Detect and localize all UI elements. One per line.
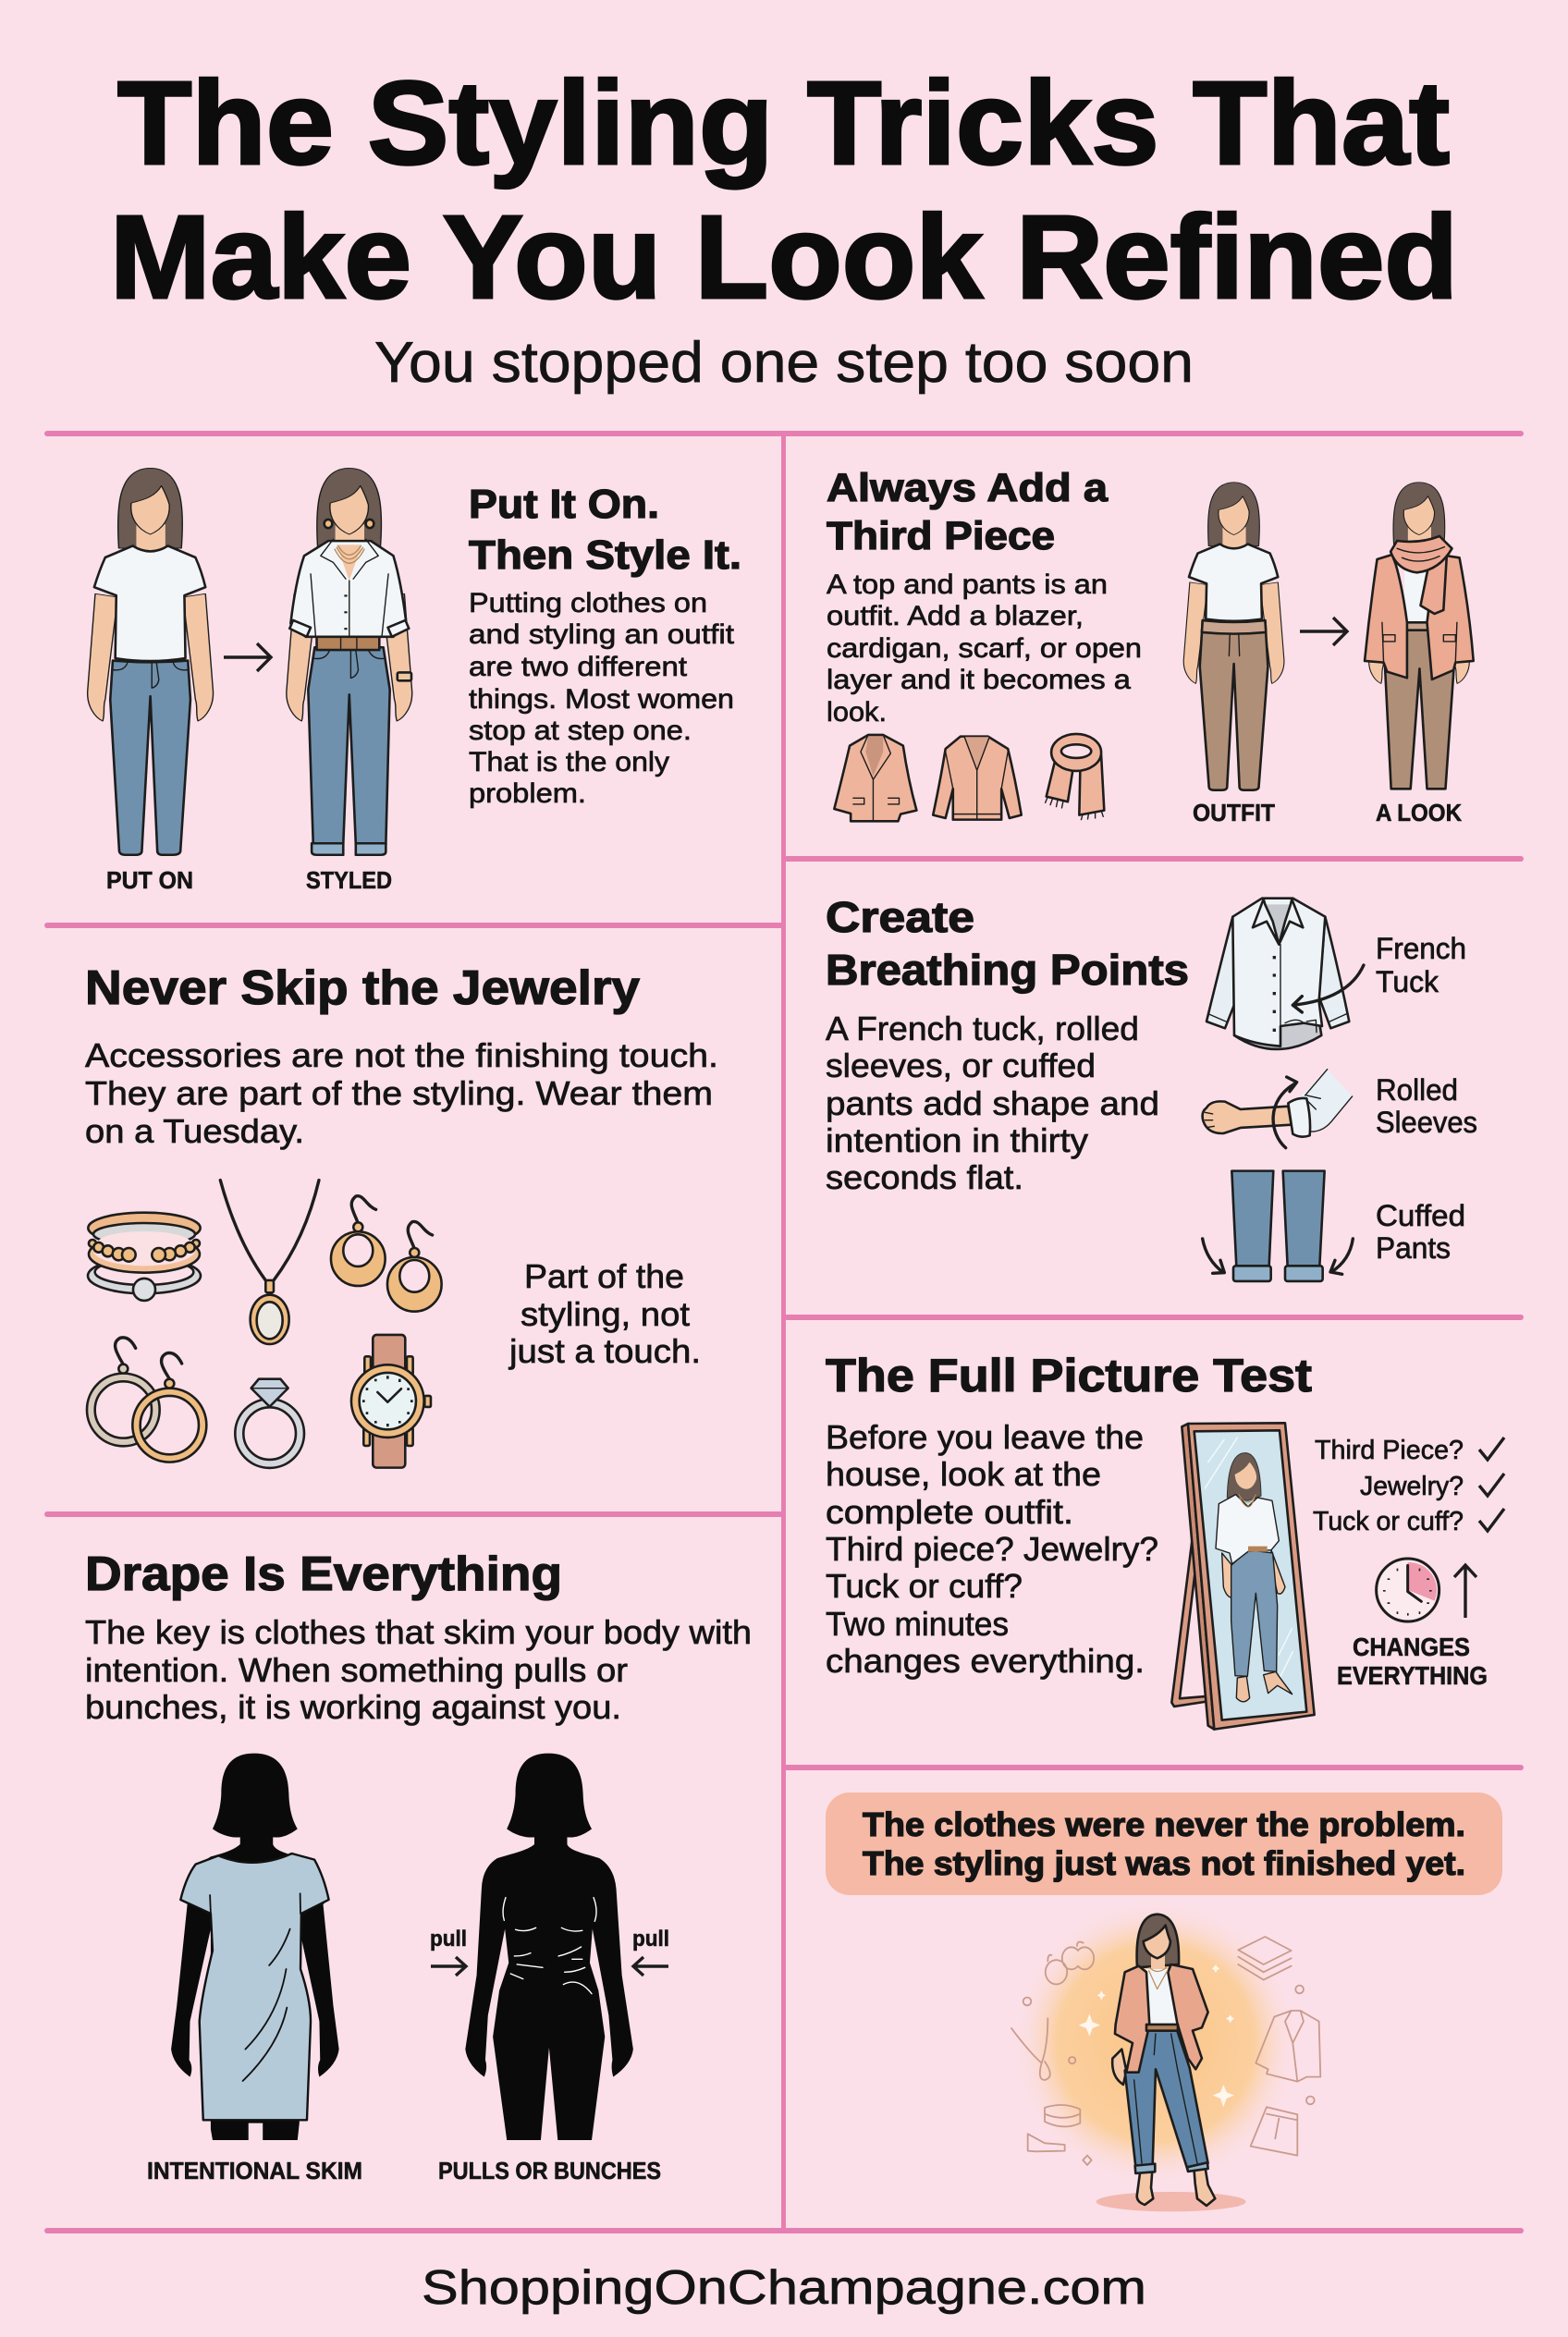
arrow bbox=[1300, 618, 1347, 645]
body text: The key is clothes that skim your body with bbox=[85, 1613, 752, 1651]
body text: changes everything. bbox=[826, 1642, 1145, 1680]
body text: are two different bbox=[469, 652, 688, 682]
icons: jewelry set bbox=[87, 1181, 442, 1468]
footer website: ShoppingOnChampagne.com bbox=[422, 2261, 1146, 2315]
title: Make You Look Refined bbox=[110, 191, 1458, 324]
panel: never skip the jewelry bbox=[85, 961, 718, 1468]
heading bbox=[827, 466, 1109, 558]
callout: The clothes were never the problem. bbox=[863, 1805, 1465, 1843]
body text bbox=[469, 588, 735, 809]
body text: Putting clothes on bbox=[469, 588, 707, 618]
body text: bunches, it is working against you. bbox=[85, 1688, 621, 1726]
heading: Breathing Points bbox=[826, 946, 1189, 994]
panel: the full picture test bbox=[826, 1350, 1504, 1730]
floor shadow bbox=[1096, 2192, 1246, 2211]
figure: outfit bbox=[1183, 483, 1284, 790]
checklist bbox=[1313, 1436, 1504, 1536]
caption: part of the styling: Part of the bbox=[524, 1257, 684, 1295]
arrow bbox=[224, 643, 271, 671]
caption: part of the styling: just a touch. bbox=[508, 1332, 701, 1370]
heading: The Full Picture Test bbox=[826, 1350, 1312, 1401]
heading bbox=[826, 893, 1189, 994]
label: changes everything: CHANGES bbox=[1353, 1633, 1470, 1661]
body text: look. bbox=[827, 697, 887, 728]
body text: Two minutes bbox=[826, 1605, 1009, 1643]
body text: layer and it becomes a bbox=[827, 665, 1131, 695]
body text: sleeves, or cuffed bbox=[826, 1046, 1096, 1084]
icon: pendant necklace bbox=[220, 1181, 319, 1344]
icon: french tuck shirt bbox=[1207, 899, 1364, 1049]
icon: cardigan bbox=[933, 737, 1022, 820]
body text: things. Most women bbox=[469, 684, 734, 715]
heading: Third Piece bbox=[827, 514, 1055, 558]
figure: pulls or bunches silhouette bbox=[465, 1754, 633, 2140]
body text: That is the only bbox=[469, 747, 669, 777]
body text: Before you leave the bbox=[826, 1418, 1144, 1456]
body text: They are part of the styling. Wear them bbox=[85, 1074, 713, 1112]
glow bbox=[1011, 1898, 1301, 2188]
callout: The styling just was not finished yet. bbox=[863, 1844, 1465, 1882]
subtitle: You stopped one step too soon bbox=[374, 331, 1194, 395]
label: french tuck bbox=[1376, 932, 1466, 998]
body text: A French tuck, rolled bbox=[826, 1009, 1139, 1047]
body text: pants add shape and bbox=[826, 1084, 1159, 1122]
body text: on a Tuesday. bbox=[85, 1112, 304, 1150]
label: styled: STYLED bbox=[306, 866, 392, 894]
body text: house, look at the bbox=[826, 1455, 1101, 1493]
heading: Then Style It. bbox=[469, 532, 741, 578]
woman bbox=[1112, 1915, 1215, 2206]
pull annotation left bbox=[430, 1927, 467, 1976]
panel: create breathing points bbox=[826, 893, 1477, 1281]
heading: Always Add a bbox=[827, 466, 1109, 510]
body text: and styling an outfit bbox=[469, 619, 735, 650]
label: cuffed pants bbox=[1376, 1199, 1465, 1265]
panel: put it on, then style it bbox=[88, 468, 741, 894]
body text bbox=[826, 1009, 1159, 1196]
body text: A top and pants is an bbox=[827, 569, 1108, 600]
label: put on: PUT ON bbox=[106, 866, 193, 894]
panel: drape is everything bbox=[85, 1548, 752, 2184]
icon: clock bbox=[1377, 1559, 1439, 1621]
figure: styled bbox=[287, 468, 412, 855]
figure: intentional skim silhouette bbox=[171, 1754, 339, 2140]
panel: always add a third piece bbox=[827, 466, 1474, 826]
label: changes everything bbox=[1337, 1633, 1488, 1690]
body text: intention. When something pulls or bbox=[85, 1651, 628, 1689]
heading bbox=[469, 482, 741, 578]
pull annotation left: pull bbox=[430, 1927, 467, 1952]
callout bbox=[826, 1793, 1502, 1895]
label: intentional skim: INTENTIONAL SKIM bbox=[147, 2157, 362, 2184]
heading: Create bbox=[826, 893, 974, 941]
checklist: Tuck or cuff? bbox=[1313, 1507, 1464, 1536]
figure: put on bbox=[88, 468, 214, 855]
body text: cardigan, scarf, or open bbox=[827, 633, 1142, 664]
label: cuffed pants: Cuffed bbox=[1376, 1199, 1465, 1232]
body text bbox=[827, 569, 1142, 728]
body text bbox=[85, 1613, 752, 1726]
label: cuffed pants: Pants bbox=[1376, 1231, 1451, 1265]
checklist: Jewelry? bbox=[1360, 1472, 1464, 1501]
pull annotation right: pull bbox=[632, 1927, 669, 1952]
body text: outfit. Add a blazer, bbox=[827, 601, 1084, 631]
body text: Third piece? Jewelry? bbox=[826, 1530, 1158, 1568]
sparkles bbox=[1079, 1964, 1234, 2107]
icon: watch bbox=[351, 1335, 431, 1468]
label: rolled sleeves: Sleeves bbox=[1376, 1106, 1477, 1139]
icon: hoop earrings bbox=[87, 1338, 206, 1462]
body text: Tuck or cuff? bbox=[826, 1567, 1023, 1605]
label: a look: A LOOK bbox=[1376, 799, 1462, 826]
caption: part of the styling: styling, not bbox=[521, 1295, 690, 1333]
title bbox=[110, 57, 1458, 324]
label: pulls or bunches: PULLS OR BUNCHES bbox=[438, 2157, 661, 2184]
caption: part of the styling bbox=[508, 1257, 701, 1370]
body text: seconds flat. bbox=[826, 1158, 1023, 1196]
body text: stop at step one. bbox=[469, 716, 692, 746]
body text: intention in thirty bbox=[826, 1121, 1088, 1159]
figure: a look bbox=[1365, 483, 1474, 789]
label: rolled sleeves bbox=[1376, 1073, 1477, 1139]
icon: blazer bbox=[834, 735, 916, 821]
label: changes everything: EVERYTHING bbox=[1337, 1661, 1488, 1690]
body text: problem. bbox=[469, 778, 586, 809]
icon: standing mirror bbox=[1171, 1423, 1315, 1730]
icon: scarf bbox=[1046, 734, 1104, 820]
label: rolled sleeves: Rolled bbox=[1376, 1073, 1458, 1107]
label: french tuck: Tuck bbox=[1376, 965, 1439, 998]
icon: bracelets bbox=[88, 1213, 201, 1301]
title: The Styling Tricks That bbox=[117, 57, 1450, 190]
illustration: styled woman with glow bbox=[1011, 1898, 1320, 2211]
heading: Never Skip the Jewelry bbox=[85, 961, 640, 1015]
panel: closing message bbox=[826, 1793, 1502, 2211]
body text: Accessories are not the finishing touch. bbox=[85, 1036, 718, 1074]
body text: complete outfit. bbox=[826, 1493, 1073, 1531]
checklist: Third Piece? bbox=[1315, 1436, 1464, 1465]
body text bbox=[85, 1036, 718, 1150]
icon: diamond ring bbox=[235, 1379, 304, 1468]
decorative wardrobe icons bbox=[1011, 1937, 1320, 2165]
heading: Put It On. bbox=[469, 482, 659, 527]
body text bbox=[826, 1418, 1158, 1680]
label: french tuck: French bbox=[1376, 932, 1466, 965]
icon: rolled sleeve bbox=[1203, 1070, 1353, 1148]
icon: drop earrings bbox=[331, 1196, 442, 1312]
heading: Drape Is Everything bbox=[85, 1548, 562, 1601]
icon: cuffed pants bbox=[1203, 1171, 1353, 1281]
arrow up bbox=[1454, 1565, 1476, 1618]
label: outfit: OUTFIT bbox=[1193, 799, 1275, 826]
pull annotation right bbox=[632, 1927, 669, 1976]
